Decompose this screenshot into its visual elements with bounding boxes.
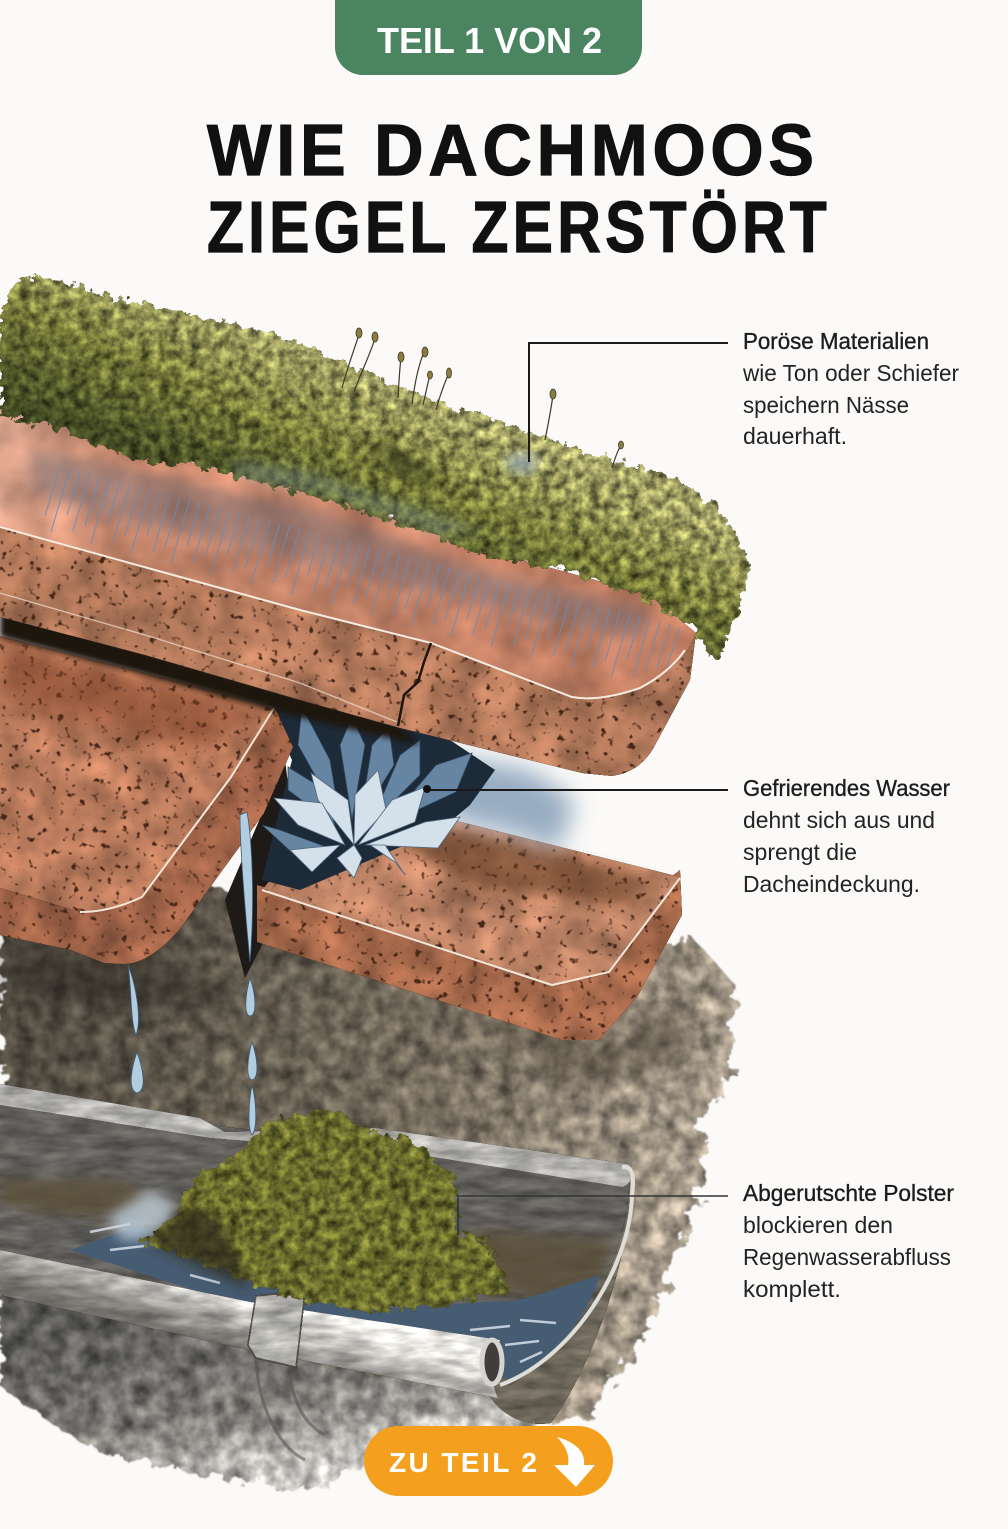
button: to part 2: ZU TEIL 2 (389, 1447, 537, 1478)
wall shadow under lower tile (470, 1000, 690, 1085)
callout: slipped cushions: blockieren den (743, 1212, 893, 1238)
callout: freezing water (743, 775, 950, 897)
callout: slipped cushions (743, 1180, 954, 1302)
front gutter rim (0, 1250, 500, 1398)
tile shade (0, 640, 270, 750)
callout: porous materials: Poröse Materialien (743, 328, 929, 354)
gutter bracket (248, 1292, 304, 1367)
front crystals (274, 770, 460, 878)
frost spray (450, 755, 575, 850)
tile front face (257, 870, 682, 1040)
callout: slipped cushions: Regenwasserabfluss (743, 1244, 951, 1270)
icon: curved down arrow (554, 1437, 595, 1487)
tile front face (0, 527, 696, 776)
illustration: moss clump in gutter (138, 1110, 510, 1312)
back crystals (262, 707, 472, 860)
shadow under tile (0, 610, 420, 745)
tile top face (0, 636, 274, 912)
illustration: lower right tile (257, 813, 682, 1040)
top tab: part indicator: TEIL 1 VON 2 (377, 20, 602, 61)
callout: freezing water: Dacheindeckung. (743, 871, 920, 897)
moss dark hollow (360, 440, 440, 485)
title: ZIEGEL ZERSTÖRT (207, 188, 831, 268)
capillary lines (45, 466, 680, 678)
callout: slipped cushions: Abgerutschte Polster (743, 1180, 954, 1206)
illustration: gutter (0, 1084, 633, 1460)
illustration: upper cracked tile (0, 405, 696, 776)
callout: freezing water: Gefrierendes Wasser (743, 775, 950, 801)
top tab: part indicator (335, 0, 642, 75)
callout: porous materials: wie Ton oder Schiefer (742, 360, 959, 386)
tile edge highlight (80, 708, 274, 912)
callout leader: freezing water (423, 785, 728, 793)
illustration: roof wall behind tiles (0, 760, 735, 1420)
gutter inner back wall (0, 1100, 629, 1385)
dark gap behind crystals (262, 700, 495, 890)
gutter debris (0, 1180, 615, 1300)
back gutter rim (0, 1084, 632, 1187)
button: to part 2 (364, 1426, 613, 1496)
dark gap between tiles (225, 760, 300, 978)
clump earth (145, 1205, 250, 1290)
tile top face (262, 813, 680, 987)
crack (398, 643, 431, 726)
illustration: ice crystals (262, 700, 575, 890)
tile side face (0, 706, 293, 964)
water patch on moss (505, 453, 539, 473)
callout leader: slipped cushions (458, 1196, 728, 1235)
bracket strap (256, 1360, 325, 1460)
illustration: left tile (0, 636, 293, 964)
gutter water (70, 1225, 600, 1380)
callout: freezing water: sprengt die (743, 839, 857, 865)
illustration: moss cushion on top tile (0, 277, 751, 663)
moss spore capsules (356, 328, 624, 449)
gutter outer shell (487, 1170, 630, 1424)
tile back shade (400, 820, 650, 905)
gutter right profile (500, 1167, 633, 1385)
wall shadow under left tile (0, 945, 240, 1010)
tile edge highlight (262, 878, 680, 985)
callout: slipped cushions: komplett. (743, 1276, 841, 1302)
callout: porous materials: speichern Nässe (743, 392, 909, 418)
moisture shade on tile (30, 450, 650, 640)
frost on moss (230, 460, 480, 535)
gutter end roll (482, 1340, 502, 1384)
title (207, 109, 831, 268)
water flecks (90, 1224, 556, 1362)
icon: water drops (128, 812, 257, 1135)
tile edge highlight (0, 527, 685, 698)
callout: porous materials (742, 328, 959, 449)
callout: freezing water: dehnt sich aus und (743, 807, 935, 833)
callout leader: porous materials (529, 343, 728, 462)
tile top face (0, 405, 696, 698)
water splash (110, 1190, 175, 1240)
tile front lip line (0, 593, 397, 722)
callout: porous materials: dauerhaft. (743, 423, 847, 449)
moss spore stalks (342, 334, 621, 468)
title: WIE DACHMOOS (207, 109, 819, 190)
illustration: gutter underside (0, 1290, 550, 1490)
